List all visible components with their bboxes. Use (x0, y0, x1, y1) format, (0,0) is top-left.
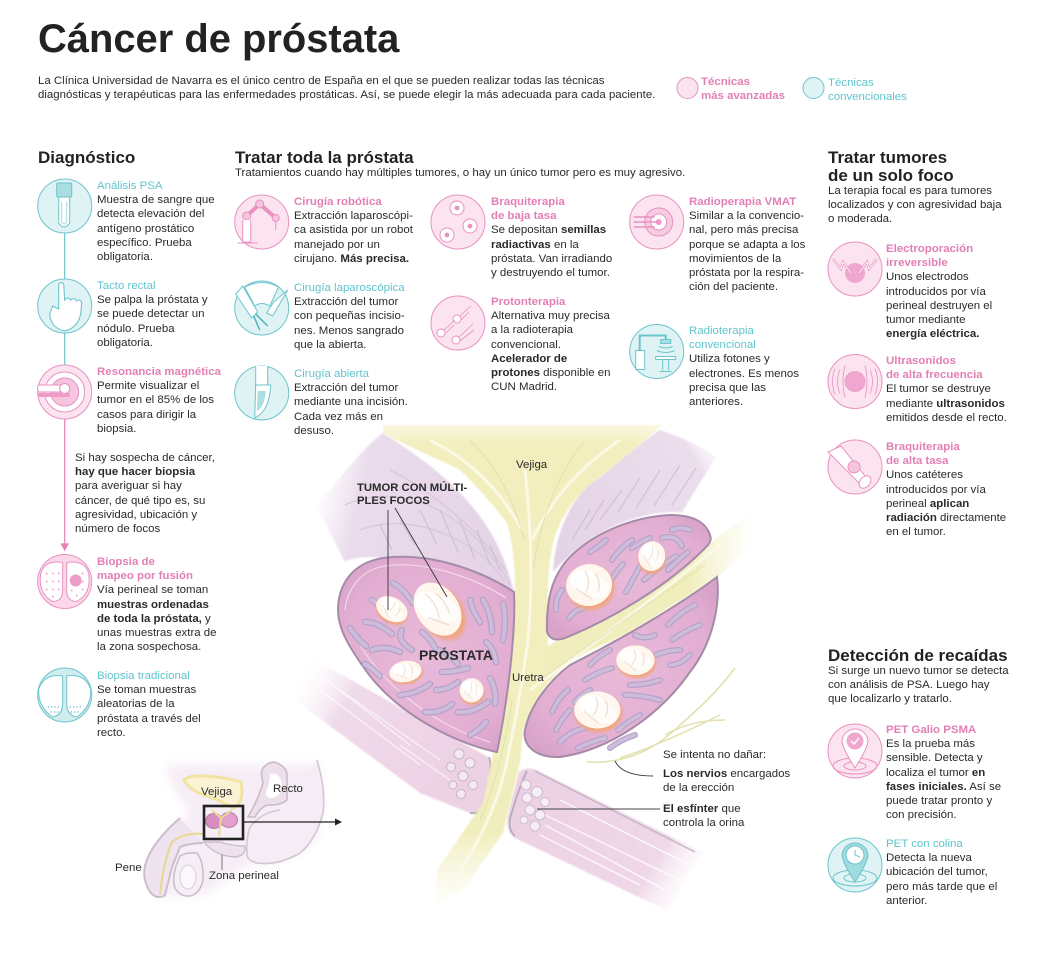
text: Braquiterapia de alta tasa: Braquiterapia (886, 441, 960, 453)
text: Cirugía laparoscópica: con pequeñas incisio- (294, 310, 405, 322)
arrow to enlargement (243, 821, 336, 823)
heading: Diagnóstico: Diagnóstico (38, 148, 135, 167)
text: Biopsia de mapeo: muestras ordenadas (97, 599, 209, 611)
urethra small (160, 834, 203, 894)
text: PET con colina: Detecta la nueva (886, 852, 972, 864)
text: Biopsia de mapeo: de toda la próstata, y (97, 613, 211, 625)
legend: conventional techniques (828, 77, 907, 103)
icon: ultrasound (828, 354, 882, 408)
text: Resonancia magnética: casos para dirigir la (97, 409, 196, 421)
body silhouette (150, 765, 320, 895)
text: sospecha de cáncer: Si hay sospecha de cáncer, (75, 452, 215, 464)
text: Análisis PSA: Muestra de sangre que (97, 194, 215, 206)
text: PET con colina: ubicación del tumor, (886, 866, 988, 878)
left muscle fibres (345, 470, 510, 585)
text: Biopsia de mapeo: mapeo por fusión (97, 570, 193, 582)
text: Cirugía abierta: mediante una incisión. (294, 396, 408, 408)
heading: Tratar tumores de un solo foco (828, 148, 954, 185)
text: Cirugía abierta: Cirugía abierta (294, 368, 369, 380)
label: Vejiga small: Vejiga (201, 786, 232, 798)
text: sospecha de cáncer: hay que hacer biopsia (75, 466, 195, 478)
text: Análisis PSA: específico. Prueba (97, 237, 192, 249)
label: Zona perineal: Zona perineal (209, 870, 279, 882)
text: Electroporación (886, 243, 992, 340)
text: Biopsia tradicional: recto. (97, 727, 126, 739)
label: tumor con múltiples focos: TUMOR CON MÚLTI- (357, 482, 467, 494)
text: Cirugía robótica: Extracción laparoscópi- (294, 210, 413, 222)
text: Resonancia magnética: tumor en el 85% de los (97, 394, 214, 406)
legend: advanced techniques: más avanzadas (701, 90, 785, 102)
heading: Detección de recaídas: Detección de recaídas (828, 646, 1008, 665)
text: Resonancia magnética: Resonancia magnética (97, 366, 221, 378)
text: nuevo tumor: Si surge un nuevo tumor se detecta (828, 665, 1009, 677)
text: Cirugía robótica: cirujano. Más precisa. (294, 253, 409, 265)
nerve leader (615, 761, 653, 776)
text: Cirugía laparoscópica: Cirugía laparoscópica (294, 282, 405, 294)
text: Electroporación: energía eléctrica. (886, 328, 979, 340)
text: Ultrasonidos: Ultrasonidos (886, 355, 956, 367)
title: Cáncer de próstata (38, 17, 399, 61)
text: Braquiterapia de alta tasa (886, 441, 1006, 538)
prostate miniature (206, 814, 222, 828)
legend: conventional techniques: convencionales (828, 91, 907, 103)
penis (144, 818, 203, 897)
text: PET con colina (886, 838, 997, 907)
text: Cirugía laparoscópica (294, 282, 405, 351)
tumours (370, 591, 413, 630)
intro text: La Clínica Universidad de Navarra es el único centro de España en el que se pueden realizar todas las técnicas (38, 75, 604, 87)
text: Electroporación: irreversible (886, 257, 948, 269)
rectum (248, 762, 287, 817)
lower right lobe (525, 577, 718, 757)
text: Protonterapia: CUN Madrid. (491, 381, 557, 393)
text: Tacto rectal: Tacto rectal (97, 280, 155, 292)
nerves (587, 668, 735, 762)
text: PET Galio PSMA: localiza el tumor en (886, 767, 985, 779)
text: Biopsia de mapeo: la zona sospechosa. (97, 641, 201, 653)
text: Braquiterapia de baja tasa (491, 196, 612, 279)
text: Radioperapia VMAT: movimientos de la (689, 253, 781, 265)
icon: scalpel (235, 366, 289, 420)
text: Análisis PSA: obligatoria. (97, 251, 153, 263)
text: Biopsia tradicional: Biopsia tradicional (97, 670, 190, 682)
text: Cirugía abierta: desuso. (294, 425, 334, 437)
text: el esfínter (663, 803, 744, 829)
text: terapia focal (828, 185, 1002, 225)
icon: finger (38, 279, 92, 333)
text: PET Galio PSMA: con precisión. (886, 809, 957, 821)
icon: linear accelerator (630, 324, 684, 378)
text: Radioperapia VMAT: ción del paciente. (689, 281, 778, 293)
left prostate lobe (338, 557, 514, 752)
text: Cirugía robótica: ca asistida por un robot (294, 224, 413, 236)
label: Vejiga: Vejiga (516, 459, 547, 471)
label: Uretra: Uretra (512, 672, 544, 684)
perineal leader (221, 855, 223, 870)
text: Cirugía robótica (294, 196, 413, 265)
icon: MRI (38, 365, 92, 419)
text: sospecha de cáncer: para averiguar si hay (75, 480, 182, 492)
text: Protonterapia: Protonterapia (491, 296, 565, 308)
text: Braquiterapia de alta tasa: perineal aplican (886, 498, 969, 510)
text: Biopsia tradicional: aleatorias de la (97, 698, 175, 710)
legend dot: conventional (803, 78, 824, 98)
text: Análisis PSA (97, 180, 215, 263)
text: Braquiterapia de alta tasa: Unos catéteres (886, 469, 963, 481)
perineum (204, 842, 245, 857)
text: Protonterapia: Alternativa muy precisa (491, 310, 610, 322)
text: sospecha de cáncer: número de focos (75, 523, 160, 535)
text: PET con colina: anterior. (886, 895, 927, 907)
text: Cirugía abierta: Extracción del tumor (294, 382, 398, 394)
text: el esfínter: El esfínter que (663, 803, 741, 815)
subheading: Tratamientos cuando hay múltiples tumores, o hay un único tumor pero es muy agresivo. (235, 167, 685, 179)
text: Biopsia de mapeo (97, 556, 217, 653)
icon: catheter (828, 440, 882, 494)
icon: laparoscopy (235, 281, 289, 335)
lower left muscle (295, 650, 490, 813)
buttock (247, 760, 324, 864)
text: PET Galio PSMA: puede tratar pronto y (886, 795, 992, 807)
scrotum (174, 853, 203, 896)
legend: conventional techniques: Técnicas (828, 77, 874, 89)
text: Radioterapia convencional: convencional (689, 339, 756, 351)
intro text: diagnósticas y terapéuticas para las enfermedades prostáticas. Así, se puede elegir la más adecuada para cada paciente. (38, 89, 655, 101)
label: Recto: Recto (273, 783, 303, 795)
zoom box (204, 806, 243, 839)
text: Radioterapia convencional: precisa que las (689, 382, 766, 394)
text: Análisis PSA: antígeno prostático (97, 223, 194, 235)
legend dot: advanced (677, 78, 698, 98)
text: Resonancia magnética: biopsia. (97, 423, 136, 435)
text: Radioterapia convencional: Utiliza fotones y (689, 353, 770, 365)
label: tumor con múltiples focos (357, 481, 467, 507)
text: Ultrasonidos: de alta frecuencia (886, 369, 983, 381)
text: Análisis PSA: detecta elevación del (97, 208, 204, 220)
lower lobe glands (552, 605, 700, 748)
text: Cirugía robótica: manejado por un (294, 239, 380, 251)
text: Ultrasonidos: mediante ultrasonidos (886, 398, 1005, 410)
text: Cirugía laparoscópica: Extracción del tumor (294, 296, 398, 308)
text: Ultrasonidos (886, 355, 1007, 424)
intro text (38, 75, 655, 101)
icon: PSA test tube (38, 179, 92, 233)
text: el esfínter: controla la orina (663, 817, 744, 829)
text: se intenta no dañar: Se intenta no dañar: (663, 749, 766, 761)
text: PET Galio PSMA: Es la prueba más (886, 738, 975, 750)
text: Electroporación: perineal destruyen el (886, 300, 992, 312)
text: Braquiterapia de alta tasa: en el tumor. (886, 526, 946, 538)
text: Braquiterapia de baja tasa: Se depositan semillas (491, 224, 606, 236)
text: Braquiterapia de baja tasa: radiactivas en la (491, 239, 579, 251)
text: nuevo tumor: con análisis de PSA. Luego hay (828, 679, 990, 691)
text: Cirugía laparoscópica: nes. Menos sangrado (294, 325, 404, 337)
bladder muscle left (316, 433, 514, 592)
lower left sphincter cluster (446, 749, 478, 798)
text: Cirugía abierta (294, 368, 408, 437)
text: Braquiterapia de baja tasa: Braquiterapia (491, 196, 565, 208)
text: PET Galio PSMA: fases iniciales. Así se (886, 781, 1001, 793)
text: sospecha de cáncer: cáncer, de qué tipo es, su (75, 495, 205, 507)
text: Radioterapia convencional (689, 325, 799, 408)
text: Radioperapia VMAT: Radioperapia VMAT (689, 196, 796, 208)
right muscle fibres (572, 465, 696, 540)
heading: Tratar tumores de un solo foco: de un solo foco (828, 166, 954, 185)
lower right muscle bundle (507, 768, 702, 911)
text: Tacto rectal: Se palpa la próstata y (97, 294, 208, 306)
text: Protonterapia (491, 296, 611, 393)
text: PET Galio PSMA (886, 724, 1001, 821)
text: terapia focal: o moderada. (828, 213, 892, 225)
legend: advanced techniques: Técnicas (701, 76, 750, 88)
text: Biopsia tradicional: Se toman muestras (97, 684, 196, 696)
text: Protonterapia: Acelerador de (491, 353, 567, 365)
text: Protonterapia: convencional. (491, 339, 561, 351)
text: Radioperapia VMAT: próstata por la respira- (689, 267, 804, 279)
anatomical section illustration (144, 760, 342, 897)
text: Electroporación: introducidos por vía (886, 286, 986, 298)
text: Radioperapia VMAT: nal, pero más precisa (689, 224, 798, 236)
text: Biopsia tradicional: próstata a través del (97, 713, 201, 725)
text: los nervios: de la erección (663, 782, 734, 794)
icon: choline pin (828, 838, 882, 892)
text: Cirugía abierta: Cada vez más en (294, 411, 383, 423)
icon: PSMA pin (828, 724, 882, 778)
text: Radioperapia VMAT (689, 196, 805, 293)
lower right sphincter cluster (520, 780, 550, 831)
text: PET con colina: PET con colina (886, 838, 963, 850)
tumour leader lines (388, 508, 447, 610)
text: Biopsia de mapeo: Biopsia de (97, 556, 155, 568)
text: nuevo tumor (828, 665, 1009, 705)
text: Tacto rectal: se puede detectar un (97, 308, 204, 320)
text: Ultrasonidos: El tumor se destruye (886, 383, 991, 395)
text: Radioterapia convencional: anteriores. (689, 396, 743, 408)
text: PET Galio PSMA: sensible. Detecta y (886, 752, 983, 764)
upper lobe glands (556, 528, 690, 618)
text: Braquiterapia de baja tasa: próstata. Van irradiando (491, 253, 612, 265)
text: Radioperapia VMAT: Similar a la convencio- (689, 210, 804, 222)
label: tumor con múltiples focos: PLES FOCOS (357, 495, 430, 507)
text: Braquiterapia de baja tasa: de baja tasa (491, 210, 556, 222)
text: Biopsia de mapeo: Vía perineal se toman (97, 584, 208, 596)
text: Electroporación: Unos electrodos (886, 271, 969, 283)
label: Pene: Pene (115, 862, 142, 874)
text: los nervios: Los nervios encargados (663, 768, 790, 780)
text: Radioterapia convencional: Radioterapia (689, 325, 754, 337)
icon: traditional biopsy (38, 668, 92, 722)
text: sospecha de cáncer: agresividad, ubicación y (75, 509, 197, 521)
bladder (184, 776, 242, 808)
text: Braquiterapia de alta tasa: introducidos por vía (886, 484, 986, 496)
heading: Tratar tumores de un solo foco: Tratar tumores (828, 148, 947, 167)
text: Radioterapia convencional: electrones. Es menos (689, 368, 799, 380)
urethra branch (546, 512, 762, 680)
main prostate illustration (295, 425, 762, 911)
bladder muscle right (553, 430, 716, 572)
urethra highlights (430, 440, 720, 885)
label: Próstata: PRÓSTATA (419, 647, 493, 663)
timeline connectors (62, 233, 68, 550)
icon: low dose seeds (431, 195, 485, 249)
text: Braquiterapia de baja tasa: y destruyendo el tumor. (491, 267, 610, 279)
text: Resonancia magnética: Permite visualizar el (97, 380, 199, 392)
text: Cirugía robótica: Cirugía robótica (294, 196, 382, 208)
text: sospecha de cáncer (75, 452, 215, 535)
text: Biopsia tradicional (97, 670, 201, 739)
icon: robot arm (235, 195, 289, 249)
text: Radioperapia VMAT: porque se adapta a los (689, 239, 805, 251)
text: nuevo tumor: que localizarlo y tratarlo. (828, 693, 952, 705)
text: Biopsia de mapeo: unas muestras extra de (97, 627, 217, 639)
text: terapia focal: localizados y con agresividad baja (828, 199, 1002, 211)
heading: Tratar toda la próstata: Tratar toda la próstata (235, 148, 414, 167)
icon: electroporation (828, 242, 882, 296)
text: Electroporación: tumor mediante (886, 314, 965, 326)
text: Cirugía laparoscópica: que la abierta. (294, 339, 366, 351)
left lobe glands (350, 583, 505, 735)
legend: advanced techniques (701, 76, 785, 102)
text: PET Galio PSMA: PET Galio PSMA (886, 724, 976, 736)
icon: VMAT target (630, 195, 684, 249)
text: Braquiterapia de alta tasa: radiación directamente (886, 512, 1006, 524)
text: Tacto rectal: obligatoria. (97, 337, 153, 349)
text: Tacto rectal: nódulo. Prueba (97, 323, 175, 335)
icon: protons (431, 296, 485, 350)
text: Tacto rectal (97, 280, 208, 349)
upper right lobe (547, 515, 711, 640)
text: Resonancia magnética (97, 366, 222, 435)
text: Análisis PSA: Análisis PSA (97, 180, 162, 192)
text: PET con colina: pero más tarde que el (886, 881, 997, 893)
text: terapia focal: La terapia focal es para tumores (828, 185, 992, 197)
text: Protonterapia: protones disponible en (491, 367, 611, 379)
text: Protonterapia: a la radioterapia (491, 324, 573, 336)
text: Ultrasonidos: emitidos desde el recto. (886, 412, 1007, 424)
text: Electroporación: Electroporación (886, 243, 973, 255)
text: Braquiterapia de alta tasa: de alta tasa (886, 455, 948, 467)
sphincter leader (537, 808, 660, 810)
icon: fusion biopsy (38, 554, 92, 608)
text: los nervios (663, 768, 790, 794)
urethra trunk (383, 425, 662, 905)
